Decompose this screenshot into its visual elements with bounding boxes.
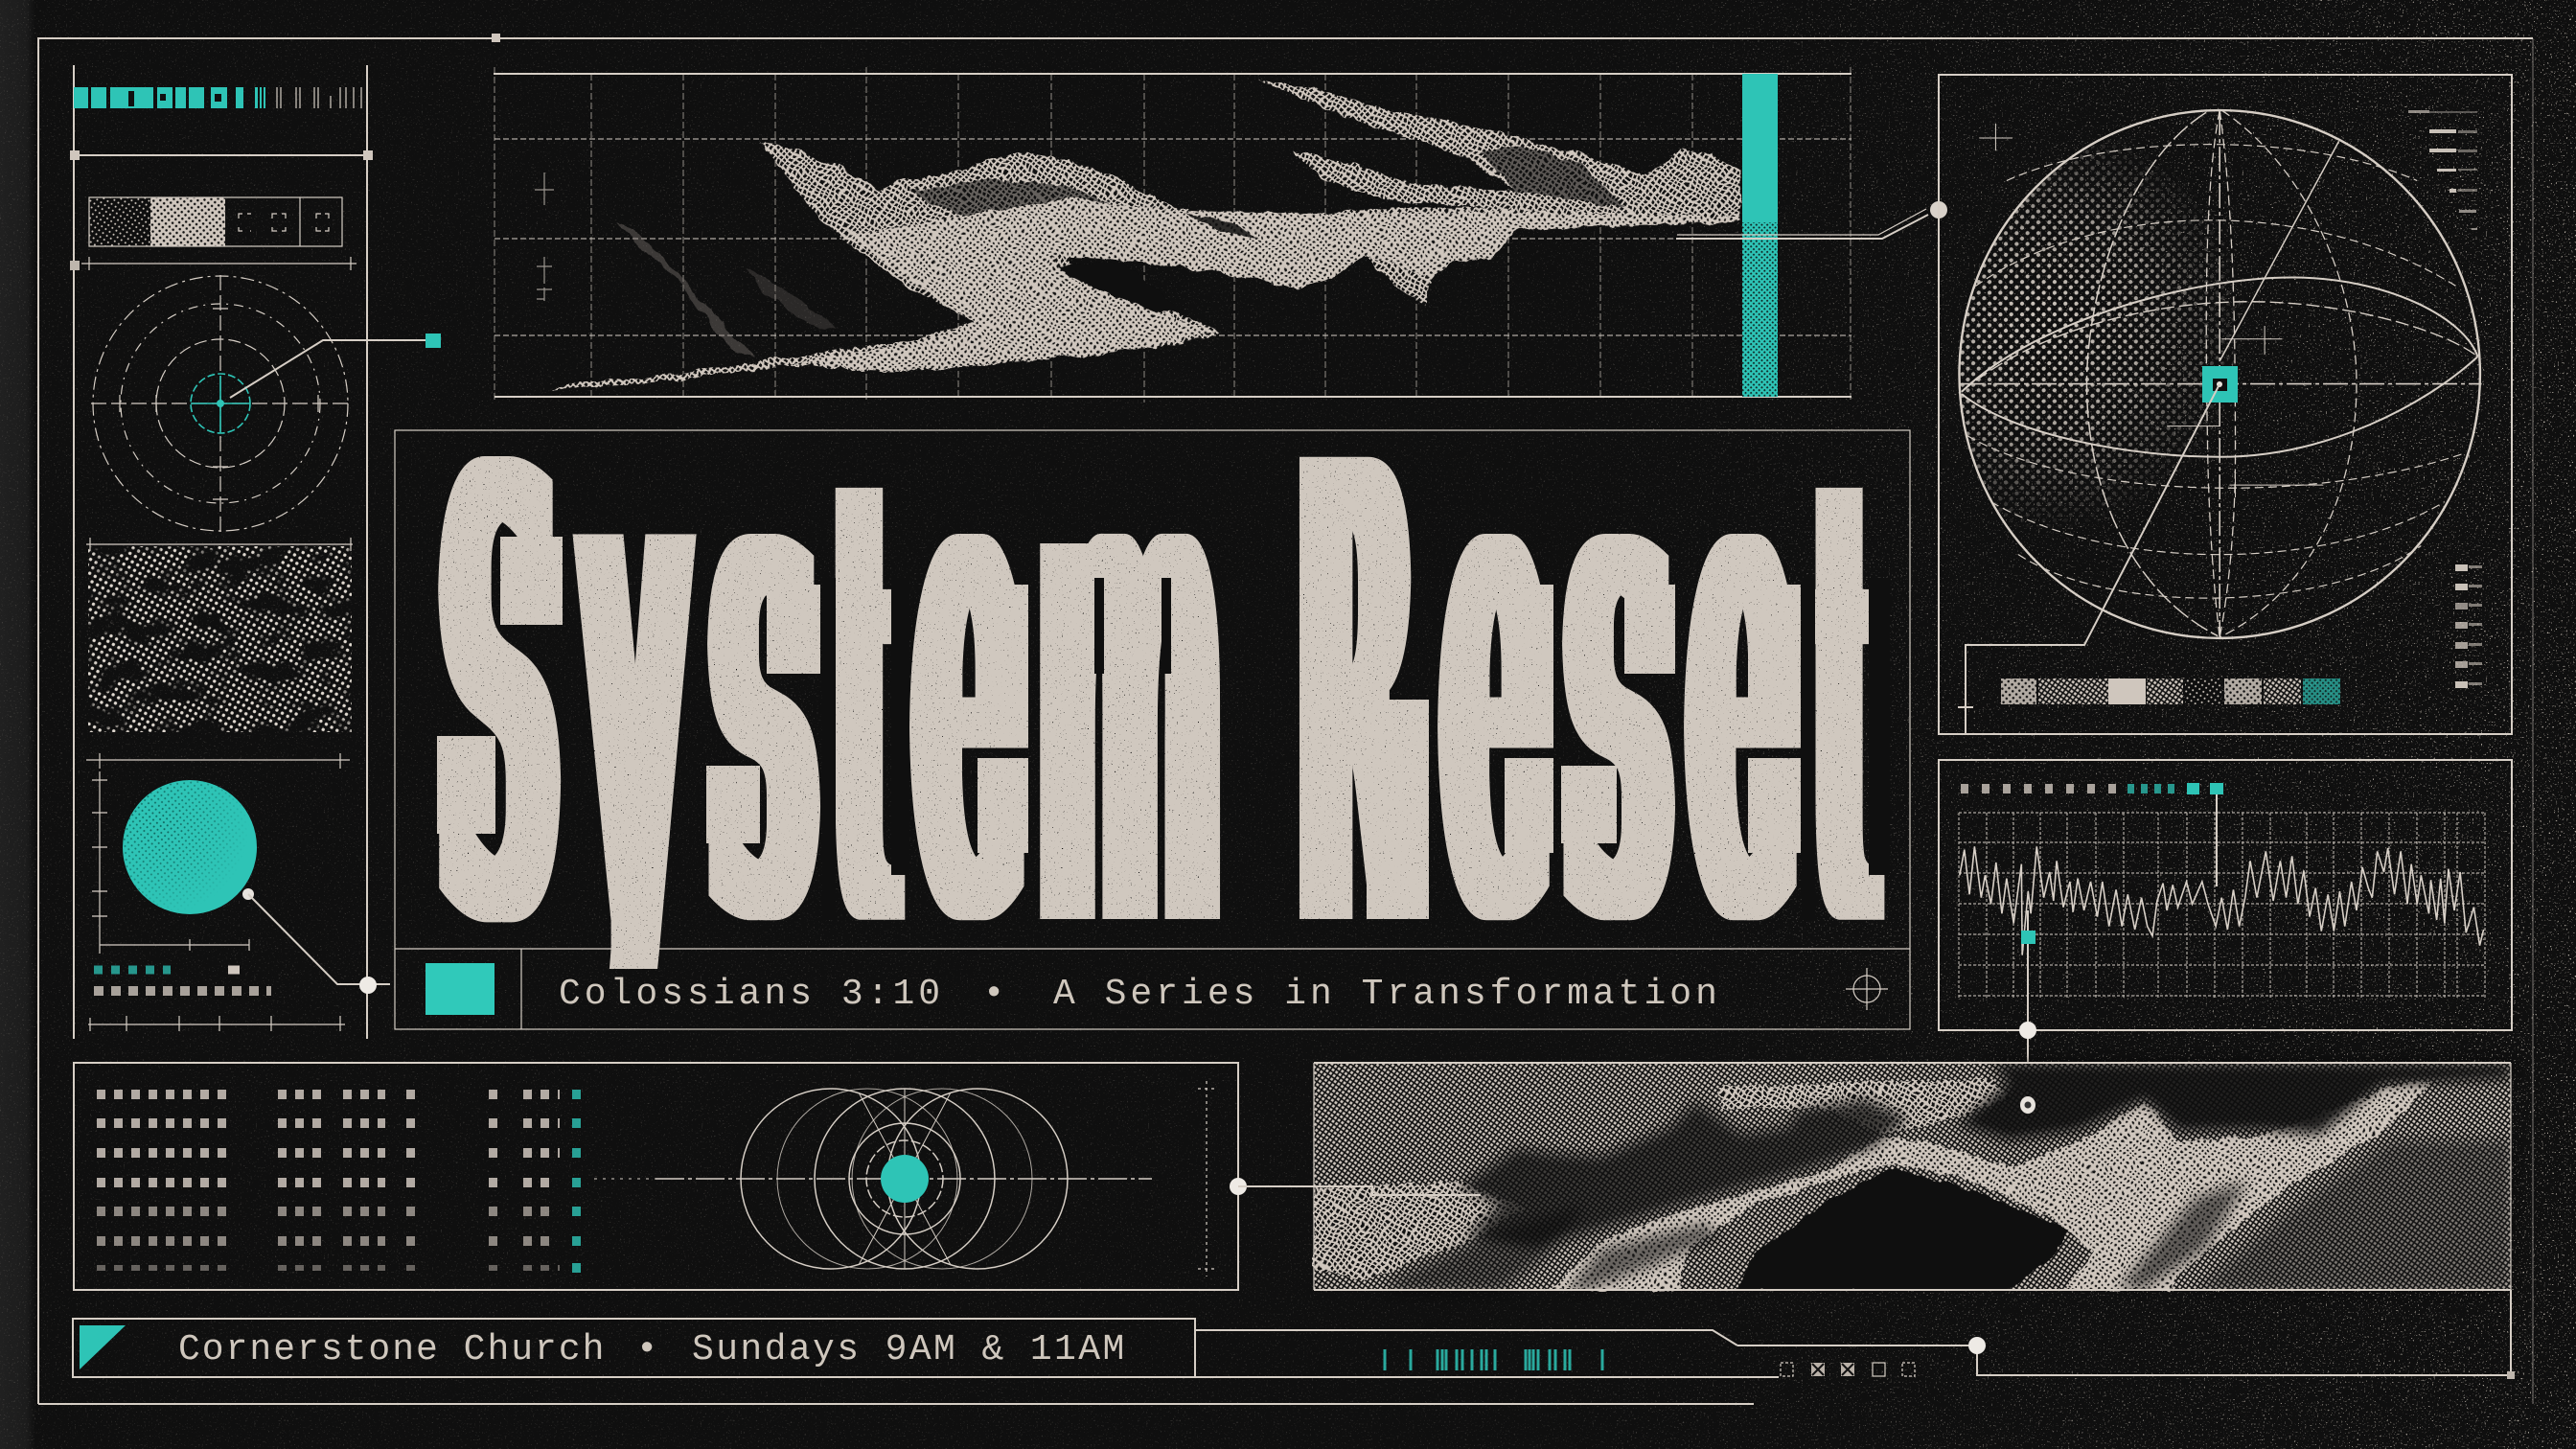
sphere callout line: [1958, 384, 2220, 734]
panel: mountain image with grid: [479, 58, 1947, 422]
title: System Reset: e: [1689, 256, 1796, 1094]
title: System Reset: t: [834, 328, 898, 1089]
panel: left instrument column: [70, 65, 441, 1039]
halftone shading: [1961, 139, 2241, 526]
circle callout: [242, 888, 390, 994]
panel: data table and rings: [74, 1063, 1238, 1290]
landscape dark peak: [1737, 1167, 2068, 1290]
radar target: [91, 275, 350, 533]
sphere target marker: [2202, 366, 2238, 402]
concentric ring diagram: [594, 1089, 1152, 1269]
title: System Reset: s: [1565, 257, 1672, 1094]
panel: dithered landscape: [1314, 1063, 2511, 1290]
panel: title: [394, 429, 1911, 1030]
halftone texture patch: [88, 546, 352, 732]
title: System Reset: S: [438, 322, 562, 1081]
subtitle: •: [957, 974, 1034, 1015]
small status boxes: [1781, 1363, 1915, 1376]
waveform line: [1960, 846, 2484, 955]
connector: rings to landscape: [1230, 1178, 1481, 1195]
teal footer barcode: [1385, 1349, 1602, 1370]
radar callout: [230, 334, 441, 398]
data tick labels: [2408, 110, 2482, 688]
footer text: Cornerstone Church: [178, 1329, 606, 1370]
grid: [494, 67, 1852, 402]
title: System Reset: t: [1814, 328, 1877, 1089]
title: System Reset: e: [914, 257, 1024, 1094]
glyph data table: [97, 1094, 581, 1268]
title: System Reset: e: [1443, 258, 1549, 1094]
subtitle: Colossians 3:10: [559, 974, 944, 1015]
teal circle plot: [92, 771, 257, 954]
wave markers: [2019, 794, 2217, 1105]
swatch strip: [2001, 678, 2340, 704]
panel: waveform: [1939, 760, 2512, 1105]
teal block: [426, 963, 494, 1015]
panel: footer bar: [73, 1319, 1195, 1377]
icon: teal triangle: [80, 1325, 126, 1369]
title: System Reset: R: [1298, 310, 1416, 1091]
title: System Reset: s: [710, 257, 817, 1094]
title counters: slits and t stems: [822, 578, 1890, 920]
teal data barcode: [74, 87, 361, 108]
subtitle: A Series in Transformation: [1053, 974, 1721, 1015]
wave grid: [1959, 813, 2485, 999]
title: System Reset: m: [1037, 250, 1222, 1106]
footer text: Sundays 9AM & 11AM: [692, 1329, 1127, 1370]
glyph row: [1961, 783, 2223, 794]
footer text: •: [612, 1329, 683, 1370]
teal vertical bar: [1742, 74, 1778, 397]
title ink: condensed letter terminals: [437, 537, 1801, 919]
footer connector circuit: [1195, 1290, 2515, 1379]
title: System Reset: [438, 456, 1884, 969]
tiny glyph rows: [94, 970, 271, 991]
icon: crosshair: [1846, 968, 1888, 1010]
pattern swatch box: [89, 197, 342, 246]
mountain callout line: [1676, 201, 1947, 239]
landscape node: [2020, 1096, 2036, 1114]
mountain halftone: [551, 79, 1742, 391]
panel: sphere: [1939, 75, 2512, 734]
title: System Reset: y: [580, 244, 690, 1092]
wireframe sphere: [1959, 110, 2482, 638]
